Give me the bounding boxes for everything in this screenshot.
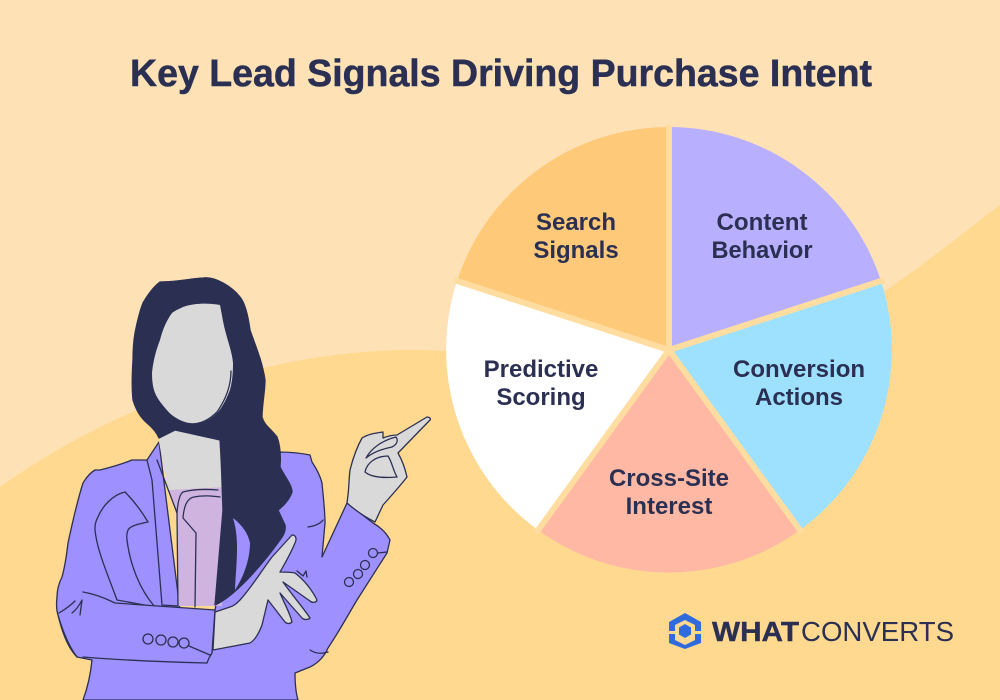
slice: Content Behavior: Content: [716, 209, 808, 236]
logo wordmark: [712, 616, 954, 647]
slice: Search Signals: Signals: [533, 237, 619, 264]
slice: Search Signals: Search: [536, 209, 616, 236]
slice: Conversion Actions: Actions: [755, 384, 843, 411]
jacket lapel: [147, 460, 178, 606]
neck: [159, 410, 224, 490]
jaw line: [158, 371, 231, 424]
slice: Search Signals: [457, 127, 669, 350]
raised hand: [347, 417, 430, 522]
jacket body: [57, 442, 390, 700]
illustration: woman pointing: [57, 278, 430, 700]
slice: Content Behavior: [669, 127, 881, 350]
blouse collar: [177, 489, 220, 607]
face: [152, 304, 233, 424]
slice: Predictive Scoring: [446, 281, 669, 530]
left sleeve cuff: [58, 592, 215, 663]
slice: Cross-Site Interest: Cross-Site: [609, 465, 729, 492]
title: Key Lead Signals Driving Purchase Intent: [130, 53, 872, 95]
slice: Content Behavior: Behavior: [712, 237, 812, 264]
logo wordmark: WHAT: [712, 616, 799, 647]
lower hand: [213, 535, 317, 650]
pie chart: [446, 127, 892, 573]
jacket pocket flap: [95, 492, 155, 607]
slice: Conversion Actions: [669, 281, 892, 530]
jacket wrinkles: [297, 520, 328, 653]
slice: Conversion Actions: Conversion: [733, 356, 865, 383]
slice: Cross-Site Interest: Interest: [626, 493, 712, 520]
left sleeve buttons: [143, 634, 210, 655]
logo wordmark: CONVERTS: [801, 616, 954, 647]
blouse: [168, 487, 224, 606]
slice: Predictive Scoring: Predictive: [484, 356, 598, 383]
logo icon: [669, 613, 701, 649]
right sleeve buttons: [344, 548, 387, 586]
slice: Predictive Scoring: Scoring: [496, 384, 586, 411]
fingers: [365, 437, 397, 477]
hair sliver: [233, 518, 250, 590]
logo: WhatConverts: [669, 613, 954, 649]
slice: Cross-Site Interest: [538, 350, 800, 573]
hair: [132, 278, 292, 605]
